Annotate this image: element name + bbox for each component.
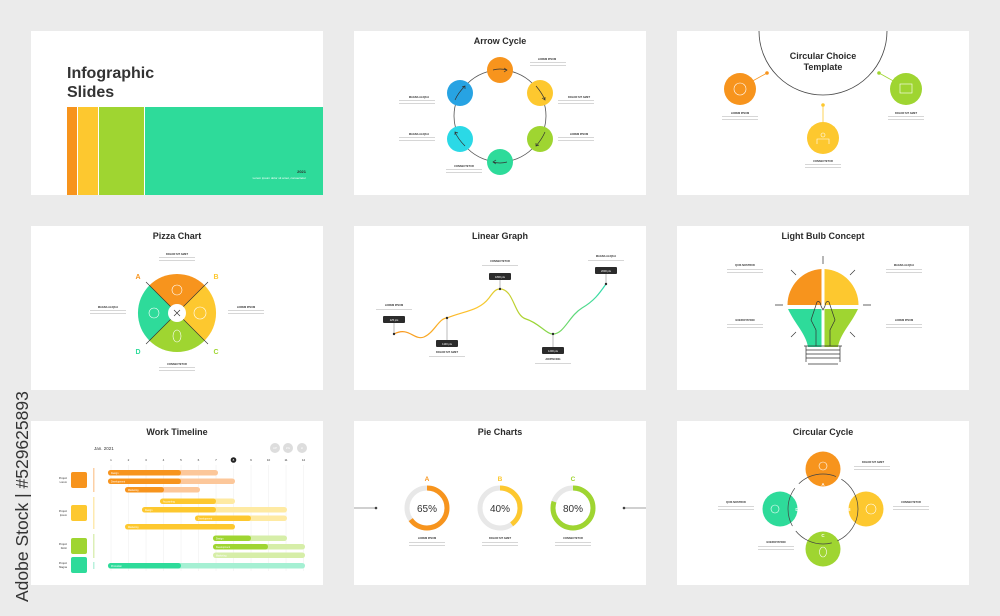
donut C 80%: C — [571, 476, 576, 483]
heading: Pizza Chart — [153, 231, 201, 241]
gantt bars: Development — [216, 546, 230, 549]
letters A-D: C — [213, 349, 219, 356]
gantt bars: Design — [216, 538, 224, 540]
labels — [722, 111, 924, 168]
gantt bars: Marketing — [128, 489, 139, 492]
big arc — [759, 31, 887, 95]
labels: CONSECTETUR — [167, 362, 187, 366]
labels — [409, 536, 591, 546]
panel: pie charts — [354, 421, 646, 585]
letters A-D: D — [135, 349, 141, 356]
project labels and icons: Project — [59, 509, 67, 513]
color bands — [67, 107, 323, 195]
labels — [90, 252, 264, 371]
grid columns: 11 — [284, 458, 288, 462]
panel: linear graph: 125 pts — [390, 318, 399, 322]
avatars — [270, 443, 307, 453]
labels: LOREM IPSUM — [237, 305, 255, 309]
labels: MAGNA ALIQUA — [98, 305, 118, 309]
panel: linear graph: 1800 pts — [495, 275, 506, 279]
project labels and icons: Project — [59, 542, 67, 546]
gantt bars: Promotion — [111, 565, 123, 568]
heading: Circular Choice — [790, 51, 856, 61]
ring — [454, 70, 546, 162]
labels: QUIS NOSTRUD — [735, 263, 755, 267]
labels — [399, 57, 594, 173]
labels: LOREM IPSUM — [418, 536, 436, 540]
labels — [376, 254, 624, 364]
heading: Work Timeline — [146, 427, 208, 437]
labels: ADIPISCING — [545, 357, 561, 361]
project labels and icons — [59, 468, 94, 573]
letters A-D: B — [213, 274, 219, 281]
grid columns: 2 — [128, 458, 130, 462]
panel: arrow cycle — [354, 31, 646, 195]
grid columns: 12 — [302, 458, 305, 462]
gantt bars: Accounting — [163, 500, 175, 504]
panel: linear graph: 1200 pts — [548, 349, 559, 353]
grid columns: 9 — [250, 458, 252, 462]
labels: MAGNA ALIQUA — [409, 95, 429, 99]
labels: EXERCITATION — [736, 318, 755, 322]
donut A 65%: 65% — [417, 504, 437, 515]
year text: Lorem ipsum dolor sit amet, consectetur — [253, 176, 306, 180]
heading: Circular Cycle — [793, 427, 853, 437]
labels: DOLOR SIT AMET — [895, 111, 917, 115]
panel: light bulb concept — [677, 226, 969, 390]
cycle circles: B — [847, 507, 851, 512]
donut C 80%: 80% — [563, 504, 583, 515]
grid columns: 10 — [267, 458, 270, 462]
cycle circles: D — [795, 507, 799, 512]
panel: circular cycle — [677, 421, 969, 585]
panel: linear graph: 1100 pts — [442, 342, 453, 346]
donut B 40%: B — [498, 476, 503, 483]
bulb — [775, 256, 871, 364]
heading: Linear Graph — [472, 231, 528, 241]
heading: Light Bulb Concept — [782, 231, 864, 241]
grid columns: 8 — [233, 458, 235, 462]
cycle circles: C — [821, 533, 825, 538]
labels: MAGNA ALIQUA — [596, 254, 616, 258]
heading: Pie Charts — [478, 427, 522, 437]
labels: CONSECTETUR — [563, 536, 583, 540]
heading: Template — [804, 62, 842, 72]
labels: DOLOR SIT AMET — [166, 252, 188, 256]
gantt bars: Marketing — [216, 554, 227, 558]
project labels and icons: Magna — [59, 565, 68, 569]
labels: CONSECTETUR — [490, 259, 510, 263]
data markers — [383, 267, 617, 354]
grid columns: 5 — [180, 458, 182, 462]
avatars: ZG — [286, 446, 291, 450]
labels: DOLOR SIT AMET — [862, 460, 884, 464]
gantt bars — [108, 470, 305, 568]
grid columns: 1 — [110, 458, 112, 462]
labels: CONSECTETUR — [901, 500, 921, 504]
curve — [394, 284, 606, 338]
labels: DOLOR SIT AMET — [489, 536, 511, 540]
panel: work timeline — [31, 421, 323, 585]
labels — [727, 263, 922, 328]
panel: circular choice template — [677, 31, 969, 195]
cycle circles: A — [821, 482, 825, 487]
panel: linear graph — [354, 226, 646, 390]
labels: LOREM IPSUM — [538, 57, 556, 61]
letters A-D: A — [135, 274, 141, 281]
gantt bars: Development — [198, 518, 212, 520]
gantt bars: Marketing — [128, 526, 139, 529]
labels: MAGNA ALIQUA — [409, 132, 429, 136]
panel: linear graph: 2000 pts — [601, 269, 612, 273]
letters A-D — [135, 274, 219, 356]
panel: work timeline: Jan. 2021 — [94, 446, 114, 451]
project labels and icons: Project — [59, 476, 67, 480]
donut B 40%: 40% — [490, 504, 510, 515]
avatars: LI — [301, 446, 303, 450]
labels: LOREM IPSUM — [895, 318, 913, 322]
side connectors — [354, 507, 646, 509]
year text: 2021 — [297, 169, 307, 174]
grid columns — [110, 457, 305, 571]
panel: pizza chart — [31, 226, 323, 390]
labels: CONSECTETUR — [454, 164, 474, 168]
labels — [718, 460, 929, 550]
year text — [253, 169, 307, 180]
grid columns: 7 — [215, 458, 217, 462]
heading: Arrow Cycle — [474, 36, 526, 46]
labels: LOREM IPSUM — [731, 111, 749, 115]
labels: LOREM IPSUM — [570, 132, 588, 136]
choice circles — [724, 71, 922, 154]
donut B 40% — [480, 476, 520, 528]
labels: LOREM IPSUM — [385, 303, 403, 307]
project labels and icons: Lorem — [60, 480, 67, 484]
grid columns: 3 — [145, 458, 147, 462]
donut C 80% — [553, 476, 593, 528]
panel: title slide — [31, 31, 323, 195]
project labels and icons: Ipsum — [60, 513, 67, 517]
labels: QUIS NOSTRUD — [726, 500, 746, 504]
grid columns: 4 — [163, 458, 165, 462]
donut A 65%: A — [425, 476, 430, 483]
gantt bars: Development — [111, 480, 125, 484]
pizza — [138, 274, 216, 352]
cycle circles — [762, 452, 884, 566]
title: Infographic Slides: Slides — [67, 84, 114, 101]
title: Infographic Slides: Infographic — [67, 65, 154, 82]
gantt bars: Design — [111, 472, 119, 475]
labels: CONSECTETUR — [813, 159, 833, 163]
labels: DOLOR SIT AMET — [436, 350, 458, 354]
project labels and icons: Project — [59, 561, 67, 565]
cycle circles with arrows — [447, 57, 553, 175]
grid columns: 6 — [198, 458, 200, 462]
watermark: Adobe Stock id: Adobe Stock | #529625893 — [12, 391, 32, 602]
avatars: AP — [273, 446, 277, 450]
gantt bars: Design — [145, 509, 153, 512]
labels: MAGNA ALIQUA — [894, 263, 914, 267]
donut A 65% — [407, 476, 447, 528]
project labels and icons: Dolor — [61, 546, 67, 550]
labels: EXERCITATION — [767, 540, 786, 544]
labels: DOLOR SIT AMET — [568, 95, 590, 99]
